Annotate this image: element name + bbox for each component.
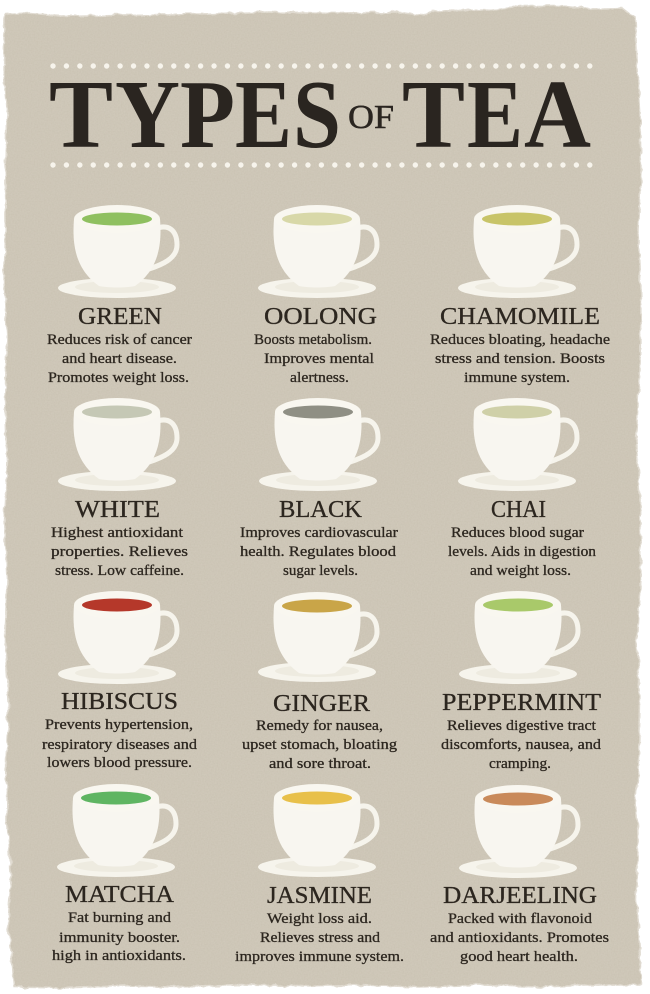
- panel: white: [51, 398, 188, 579]
- title: [49, 61, 591, 168]
- description: ginger: Remedy for nausea,: [256, 718, 383, 734]
- description: hibiscus: lowers blood pressure.: [47, 755, 192, 771]
- heading: oolong: OOLONG: [264, 304, 377, 330]
- icon: ginger tea cup: [258, 592, 377, 682]
- icon: darjeeling tea cup: [459, 785, 578, 878]
- description: darjeeling: [430, 911, 609, 965]
- panel: ginger: [242, 592, 398, 772]
- icon: oolong tea cup: [258, 205, 377, 298]
- heading: ginger: GINGER: [273, 691, 370, 717]
- panel: black: [240, 398, 398, 579]
- description: green: Reduces risk of cancer: [47, 332, 192, 348]
- title: Y: [115, 61, 180, 168]
- title: OF: [348, 99, 394, 136]
- panel: green: [47, 205, 192, 386]
- icon: white tea cup: [58, 398, 177, 491]
- title: S: [293, 61, 341, 168]
- description: white: Highest antioxidant: [51, 525, 184, 541]
- panel: oolong: [254, 205, 377, 386]
- panel: peppermint: [441, 591, 602, 772]
- description: darjeeling: and antioxidants. Promotes: [430, 930, 609, 946]
- description: peppermint: cramping.: [489, 756, 551, 772]
- description: green: and heart disease.: [62, 351, 177, 367]
- heading: chamomile: CHAMOMILE: [440, 304, 600, 330]
- description: chai: Reduces blood sugar: [451, 525, 584, 541]
- description: ginger: and sore throat.: [269, 756, 371, 772]
- description: ginger: [242, 718, 398, 772]
- description: chamomile: stress and tension. Boosts: [435, 351, 605, 367]
- panel: jasmine: [235, 784, 404, 965]
- icon: chamomile tea cup: [458, 205, 577, 298]
- description: oolong: Improves mental: [264, 351, 374, 367]
- title: E: [467, 61, 523, 168]
- description: chamomile: [430, 332, 610, 386]
- heading: matcha: MATCHA: [65, 882, 175, 908]
- heading: green: GREEN: [78, 304, 162, 330]
- description: matcha: high in antioxidants.: [52, 948, 186, 964]
- description: matcha: [52, 910, 186, 964]
- description: chai: and weight loss.: [470, 563, 571, 579]
- icon: jasmine tea cup: [258, 784, 377, 877]
- description: darjeeling: Packed with flavonoid: [448, 911, 593, 927]
- icon: hibiscus tea cup: [58, 591, 177, 684]
- description: green: [47, 332, 192, 386]
- description: matcha: Fat burning and: [68, 910, 172, 926]
- description: hibiscus: Prevents hypertension,: [45, 717, 193, 733]
- description: ginger: upset stomach, bloating: [242, 737, 398, 753]
- description: chamomile: immune system.: [464, 370, 570, 386]
- description: black: [240, 525, 398, 579]
- description: chamomile: Reduces bloating, headache: [430, 332, 610, 348]
- description: oolong: Boosts metabolism.: [254, 332, 372, 348]
- title: A: [524, 61, 591, 168]
- description: jasmine: Weight loss aid.: [267, 911, 372, 927]
- description: black: Improves cardiovascular: [240, 525, 398, 541]
- description: peppermint: discomforts, nausea, and: [441, 737, 602, 753]
- panel: chai: [448, 398, 597, 579]
- description: white: [51, 525, 188, 579]
- description: hibiscus: [42, 717, 198, 771]
- description: black: health. Regulates blood: [240, 544, 397, 560]
- description: white: properties. Relieves: [51, 544, 188, 560]
- title: T: [49, 61, 113, 168]
- bottom dotted border: [53, 162, 590, 168]
- panel: chamomile: [430, 205, 610, 386]
- description: green: Promotes weight loss.: [48, 370, 189, 386]
- heading: chai: CHAI: [491, 497, 546, 523]
- description: peppermint: [441, 718, 602, 772]
- icon: matcha tea cup: [57, 784, 176, 877]
- description: darjeeling: good heart health.: [460, 949, 578, 965]
- description: black: sugar levels.: [283, 563, 358, 579]
- description: peppermint: Relieves digestive tract: [447, 718, 597, 734]
- icon: peppermint tea cup: [459, 591, 578, 684]
- heading: darjeeling: DARJEELING: [443, 883, 597, 909]
- description: oolong: [254, 332, 374, 386]
- description: jasmine: [235, 911, 404, 965]
- heading: peppermint: PEPPERMINT: [442, 690, 601, 716]
- description: jasmine: improves immune system.: [235, 949, 404, 965]
- panel: hibiscus: [42, 591, 198, 771]
- description: jasmine: Relieves stress and: [260, 930, 381, 946]
- description: chai: [448, 525, 597, 579]
- description: white: stress. Low caffeine.: [55, 563, 184, 579]
- heading: hibiscus: HIBISCUS: [61, 689, 178, 715]
- heading: jasmine: JASMINE: [267, 883, 372, 909]
- title: P: [180, 61, 235, 168]
- icon: black tea cup: [259, 398, 378, 491]
- description: oolong: alertness.: [290, 370, 349, 386]
- heading: white: WHITE: [75, 497, 160, 523]
- title: E: [235, 61, 292, 168]
- description: chai: levels. Aids in digestion: [448, 544, 597, 560]
- icon: green tea cup: [58, 205, 177, 298]
- top dotted border: [53, 63, 590, 69]
- heading: black: BLACK: [279, 497, 363, 523]
- panel: darjeeling: [430, 785, 609, 965]
- description: hibiscus: respiratory diseases and: [42, 737, 198, 753]
- description: matcha: immunity booster.: [59, 930, 180, 946]
- title: T: [402, 61, 465, 168]
- icon: chai tea cup: [458, 398, 577, 491]
- panel: matcha: [52, 784, 186, 964]
